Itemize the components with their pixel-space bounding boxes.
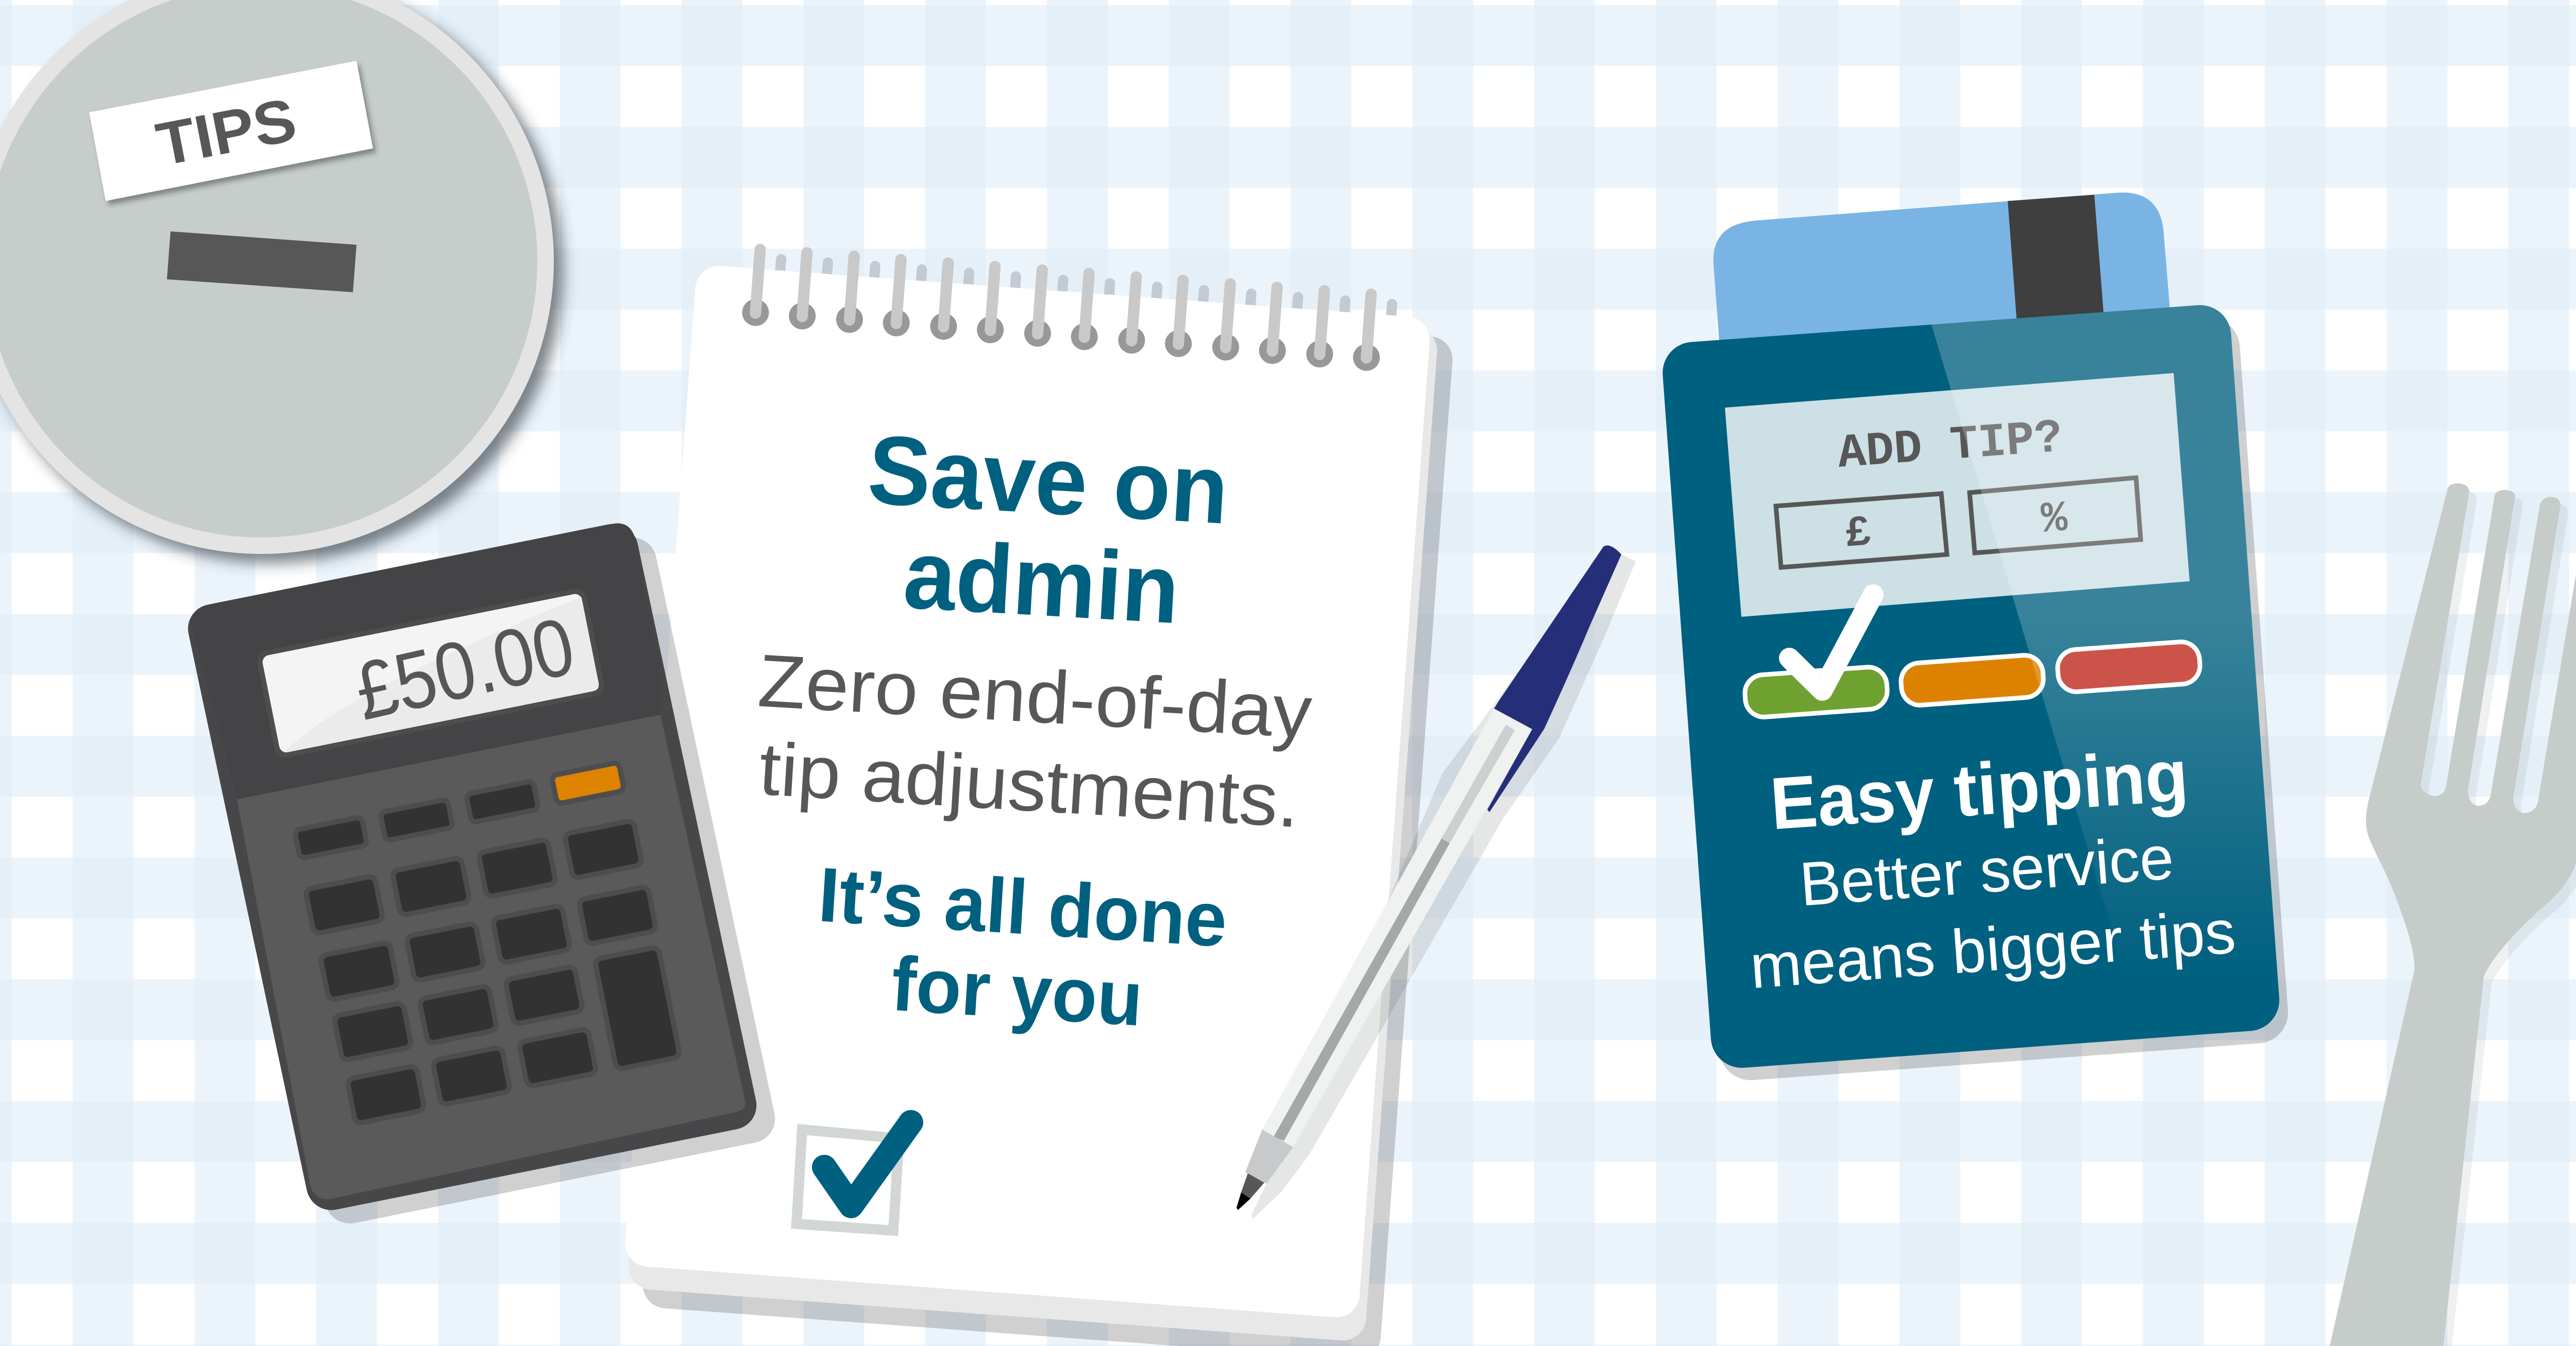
icon: ballpoint pen [1236,546,1636,1219]
text block: easy tipping: Easy tipping [1768,734,2191,845]
text block: it's all done for you [816,851,1230,1042]
text block: it's all done for you: It’s all done [816,851,1230,963]
icon: calculator [183,519,779,1228]
terminal screen: ADD TIP? [1836,411,2064,481]
heading: Save on admin [865,415,1231,644]
icon: white tick [1789,595,1873,691]
heading: Save on admin: Save on [865,415,1231,545]
tips label: TIPS [151,86,301,179]
text block: easy tipping: means bigger tips [1748,897,2238,1001]
text block: zero end-of-day tip adjustments: tip adjustments. [757,727,1302,843]
heading: Save on admin: admin [901,519,1182,644]
panel: spiral notebook [621,245,1457,1346]
terminal screen: % [2040,494,2070,545]
text block: easy tipping: Better service [1798,823,2176,919]
icon: checkbox with tick [796,1122,911,1231]
terminal screen: £ [1843,509,1873,560]
tips label [89,61,376,205]
calculator display: £50.00 [347,600,582,737]
text block: it's all done for you: for you [889,940,1145,1042]
terminal button: cancel [2056,641,2201,693]
terminal screen [1725,373,2190,617]
panel: card terminal [1660,294,2293,1082]
text block: zero end-of-day tip adjustments: Zero end-of-day [756,638,1314,754]
icon: spiral binding rings [741,248,1384,372]
tip slot [167,231,357,292]
text block: zero end-of-day tip adjustments [756,638,1314,843]
calculator keypad [296,765,679,1121]
calculator display [255,587,606,760]
icon: tips plate [0,0,563,563]
icon: fork [2330,483,2576,1346]
icon: bank card [1714,193,2172,356]
text block: easy tipping [1748,734,2238,1001]
terminal buttons: go and wait [1743,654,2045,718]
